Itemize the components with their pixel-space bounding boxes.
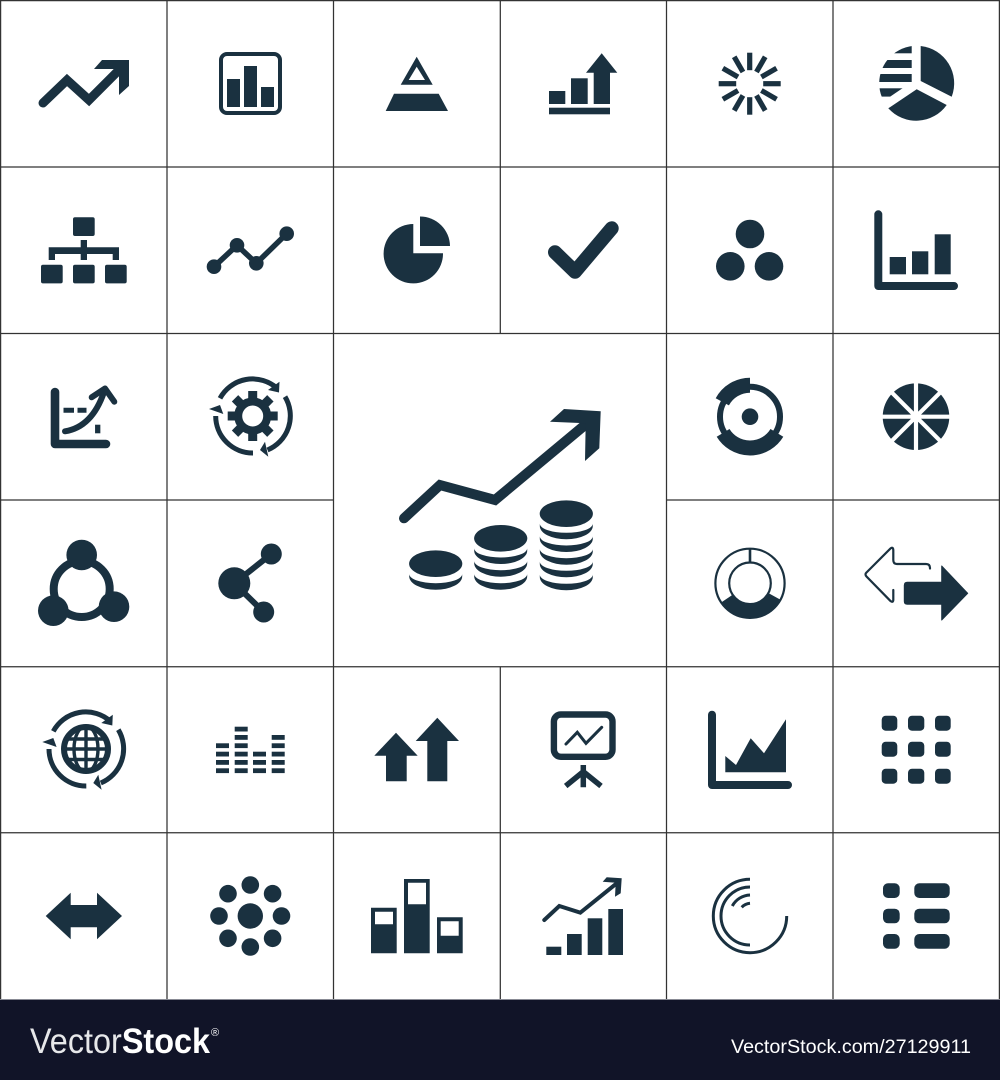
logo text: VectorStock	[30, 1022, 210, 1061]
icon: rising stairs arrow	[549, 53, 617, 114]
icon: pyramid	[386, 57, 448, 111]
icon: line graph with dots	[207, 226, 294, 274]
icon: axis bar chart	[878, 214, 954, 286]
icon: share nodes	[218, 544, 282, 622]
image id text: VectorStock.com/27129911	[731, 1036, 971, 1058]
icon: striped pie chart	[879, 46, 954, 121]
icon: presentation board	[554, 714, 612, 787]
footer bar	[0, 1000, 1000, 1080]
icon: horizontal double arrow	[46, 893, 122, 939]
icon: equalizer bars	[216, 727, 285, 773]
icon: bars with growth arrow	[544, 877, 623, 955]
icon: organisation hierarchy	[41, 217, 127, 283]
icon: growth curve on axes	[55, 388, 114, 444]
icon: zigzag trend arrow	[43, 60, 129, 103]
coin stack: tall	[540, 500, 593, 590]
coin stack: medium	[474, 525, 527, 590]
icon: thin donut chart with filled segment	[715, 548, 785, 618]
icon: bar chart in rounded box	[221, 54, 280, 113]
icon: featured growth arrow over coin stacks	[404, 409, 601, 590]
icon: pie chart with detached quarter	[384, 216, 450, 283]
icon: nine-square grid	[882, 716, 951, 784]
icon: ring with thick segments and centre dot	[720, 385, 780, 448]
growth arrow line	[404, 409, 601, 518]
icon: gear with cycle arrows	[209, 379, 290, 457]
icon: loading spinner	[719, 53, 781, 115]
icon: eight-slice pie	[880, 380, 952, 453]
icon: list	[883, 883, 950, 949]
registered mark: ®	[211, 1027, 219, 1039]
icon: check mark	[555, 228, 612, 272]
icon: three circles	[716, 220, 783, 281]
icon: globe with cycle arrows	[42, 712, 124, 790]
icon: double up arrows	[374, 718, 459, 781]
icon: ring of dots	[210, 876, 290, 956]
icon: area chart on axes	[712, 715, 788, 785]
icon: bars with windows	[371, 879, 463, 953]
icon: three connected circles	[38, 540, 129, 626]
icon: exchange arrows	[866, 548, 968, 620]
coin stack: small	[409, 550, 462, 590]
icon: radial arcs	[713, 879, 787, 953]
